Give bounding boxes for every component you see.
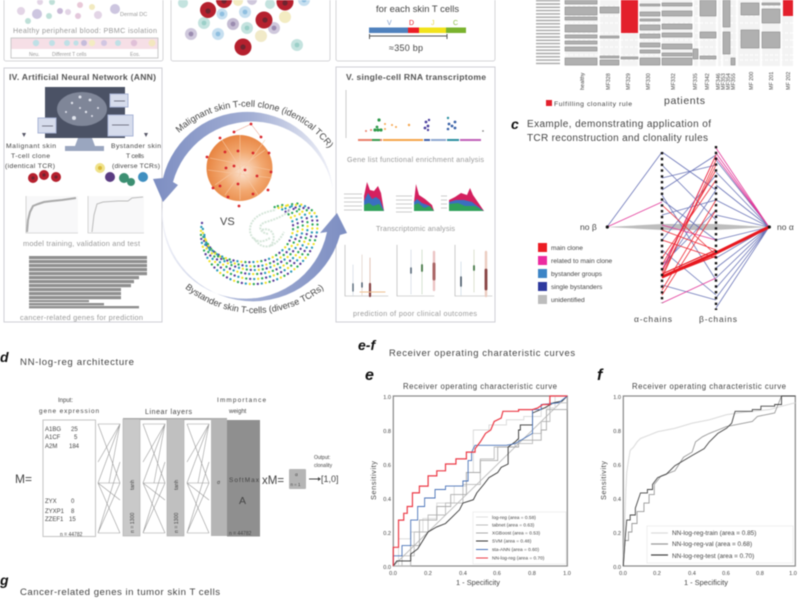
chart: ROC curve f: 0.0 — [613, 565, 621, 571]
chart: ROC curve e: 0.0 — [389, 571, 397, 577]
arrow: upper crescent — [153, 112, 333, 202]
panel: TCR sequence — [336, 0, 495, 61]
diagram: NN-log-reg architecture: σ — [217, 480, 221, 486]
legend: clone types — [538, 243, 613, 304]
caption: cancer-related genes: cancer-related genes for prediction — [20, 313, 143, 322]
diagram: NN-log-reg architecture: 0 — [71, 499, 75, 505]
chart: ROC curve f: Receiver operating characteristic curve — [632, 382, 786, 391]
axis: sample labels — [536, 0, 560, 65]
chart: ROC curve f: 1.0 — [613, 395, 621, 401]
icon: diverse bystander cells — [95, 163, 148, 186]
legend: ROC f: NN-log-reg-test (area = 0.70) — [672, 553, 754, 560]
axis: patient labels: healthy — [580, 72, 586, 90]
chart: ROC curve f: 0.4 — [688, 571, 696, 577]
diagram: NN-log-reg architecture: weight — [228, 409, 247, 415]
heading: panel c: TCR reconstruction and clonality rules — [527, 133, 708, 144]
legend: clone types: related to main clone — [551, 258, 613, 265]
heading: panel g: Cancer-related genes in tumor skin T cells — [20, 587, 220, 598]
chart: ROC curve e: 0.8 — [383, 429, 391, 435]
diagram: NN-log-reg architecture: A — [239, 495, 246, 507]
network: malignant clone — [206, 123, 272, 207]
legend: ROC e: SVM (area = 0.48) — [492, 538, 532, 544]
label: beta chains: β-chains — [699, 314, 737, 324]
label: f: f — [597, 367, 604, 384]
caption: enrichment: Gene list functional enrichment analysis — [347, 155, 484, 164]
axis: patient labels: MF330 — [646, 73, 652, 90]
diagram: VDJC segments: C — [453, 20, 458, 27]
heading: panel d: d — [0, 349, 9, 365]
diagram: NN-log-reg architecture: 184 — [69, 444, 80, 450]
diagram: NN-log-reg architecture: Immportance — [217, 397, 266, 404]
panel: healthy peripheral blood — [4, 0, 163, 61]
legend: clone types: unidentified — [551, 297, 585, 304]
axis: patient labels: MF 200 — [749, 72, 755, 90]
axis: patient labels: MF354 — [726, 73, 732, 90]
legend: clone types: bystander groups — [551, 271, 603, 278]
chart: ROC curve e: 0.0 — [383, 565, 391, 571]
axis: patient labels: MF353 — [721, 73, 727, 90]
legend: ROC e: tabnet (area = 0.63) — [492, 522, 535, 528]
diagram: NN-log-reg architecture: n = 44782 — [60, 532, 83, 538]
chart: ROC curve e: 0.4 — [383, 497, 391, 503]
chart: ROC curve f: 1 - Specificity — [684, 578, 728, 587]
legend: clone types: single bystanders — [551, 284, 603, 291]
label: no alpha: no α — [777, 222, 794, 232]
chart: gene importance bars — [29, 256, 147, 308]
chart: ROC curve e: 0.6 — [493, 571, 501, 577]
caption: clinical outcomes: prediction of poor clinical outcomes — [353, 309, 477, 318]
heading: panel g — [0, 572, 220, 598]
label: alpha chains: α-chains — [634, 314, 672, 324]
axis: patient labels: MF335 — [693, 73, 699, 90]
diagram: VDJC segments: J — [431, 20, 434, 27]
legend: ROC e — [473, 512, 566, 564]
label: bystander cells: T cells — [126, 153, 145, 160]
text: for each skin T cells: for each skin T cells — [376, 3, 459, 14]
chart: ROC curve e: 0.4 — [459, 571, 467, 577]
diagram: NN-log-reg architecture: tanh — [174, 480, 180, 490]
legend: clonality rule: Fulfilling clonality rule — [554, 101, 632, 108]
icon: red clone cells — [28, 170, 61, 183]
legend: ROC e: NN-log-reg (area = 0.70) — [492, 556, 545, 562]
diagram: NN-log-reg architecture: ZYX — [45, 499, 57, 505]
chart: ROC curve e: 0.8 — [528, 571, 536, 577]
diagram: NN-log-reg architecture: n = 1300 — [174, 513, 180, 533]
chart: ROC curve f: 0.6 — [722, 571, 730, 577]
diagram: NN-log-reg architecture: xM= — [262, 475, 284, 487]
diagram: NN-log-reg architecture: ZZEF1 — [45, 517, 64, 523]
label: malignant clone: Malignant skin — [6, 143, 56, 150]
label: no beta: no β — [580, 222, 597, 232]
chart: ROC curve f: 0.2 — [653, 571, 661, 577]
chart: ROC curve e: Receiver operating characteristic curve — [403, 382, 557, 391]
label: e: e — [365, 367, 374, 384]
axis: patient labels: MF342 — [705, 73, 711, 90]
diagram: NN-log-reg architecture: Output: — [314, 455, 330, 461]
chart: ROC curve e: 1.0 — [383, 395, 391, 401]
heading: panel IV: IV. Artificial Neural Network (ANN) — [9, 72, 156, 82]
label: malignant arc: Malignant skin T-cell clone (identical TCR) — [175, 100, 334, 149]
panel: IV artificial neural network — [4, 68, 162, 322]
chart: outcome strip plots — [345, 245, 492, 296]
legend: clone types: main clone — [551, 245, 583, 252]
label: malignant clone — [5, 143, 56, 170]
chart: ROC curve e: 1 - Specificity — [456, 578, 500, 587]
legend: ROC e: sta-ANN (area = 0.60) — [492, 547, 539, 553]
axis title: patients: patients — [664, 95, 705, 107]
chart: ROC curve e: Sensitivity — [369, 461, 378, 500]
heading: panel d — [0, 349, 134, 368]
chart: ROC curve e: 0.2 — [424, 571, 432, 577]
diagram: NN-log-reg architecture: n = 1 — [290, 482, 301, 487]
panel: healthy peripheral blood: Different T cells — [52, 52, 87, 58]
heading: PBMC isolation: Healthy peripheral blood: PBMC isolation — [13, 26, 157, 35]
axis: patient labels: MF355 — [731, 73, 737, 90]
caption: training: model training, validation and test — [23, 239, 140, 248]
label: bystander cells: Bystander skin — [111, 143, 161, 150]
axis: patient labels: MF 202 — [786, 72, 792, 90]
diagram: NN-log-reg architecture: ZYXP1 — [45, 509, 65, 515]
axis: patient labels — [580, 72, 792, 90]
label: malignant clone: T-cell clone — [11, 153, 50, 160]
chart: TCR alluvial network — [606, 146, 771, 310]
icon: monitor with neural brain — [38, 87, 133, 151]
caption: transcriptomic: Transcriptomic analysis — [376, 224, 455, 233]
heading: panel c — [511, 116, 711, 144]
panel: healthy peripheral blood: Dermal DC — [120, 12, 147, 18]
chart: ROC curve f: 0.0 — [619, 571, 627, 577]
axis: patient labels: MF 201 — [769, 72, 775, 90]
diagram: NN-log-reg architecture: 25 — [71, 427, 78, 433]
chart: training curves — [26, 196, 144, 233]
chart: ROC curve e: 0.6 — [383, 463, 391, 469]
legend: ROC e: XGBoost (area = 0.53) — [492, 530, 541, 536]
axis: patient labels: MF346 — [716, 73, 722, 90]
heading: panels e-f — [358, 337, 575, 358]
heading: panel c: c — [511, 116, 519, 132]
arrow: lower crescent — [162, 203, 347, 301]
diagram: VDJC segments — [369, 20, 466, 53]
chart: ROC curve f: 0.6 — [613, 463, 621, 469]
chart: ridge plots — [344, 182, 484, 212]
diagram: NN-log-reg architecture: A1BG — [45, 427, 61, 433]
panel b: clonality heatmap — [548, 0, 793, 66]
diagram: VDJC segments: V — [387, 20, 392, 27]
diagram: NN-log-reg architecture: 5 — [74, 435, 78, 441]
axis: patient labels: MF329 — [626, 73, 632, 90]
diagram: NN-log-reg architecture: 15 — [69, 517, 76, 523]
chart: ROC curve f: 0.2 — [613, 531, 621, 537]
chart: enrichment dots — [346, 90, 484, 141]
diagram: NN-log-reg architecture: A1CF — [45, 435, 61, 441]
axis: patient labels: MF328 — [606, 73, 612, 90]
chart: ROC curve f: 1.0 — [789, 571, 797, 577]
diagram: NN-log-reg architecture: α — [295, 473, 298, 478]
panel: V single-cell RNA transcriptome — [336, 67, 495, 322]
diagram: NN-log-reg architecture: A2M — [45, 444, 57, 450]
diagram: NN-log-reg architecture: Input: — [58, 398, 73, 404]
label: VS: VS — [220, 216, 235, 228]
chart: ROC curve e: 1.0 — [563, 571, 571, 577]
heading: panel d: NN-log-reg architecture — [20, 357, 134, 368]
network: bystander spiral — [201, 203, 317, 284]
diagram: NN-log-reg architecture: Linear layers — [145, 409, 192, 416]
chart: ROC curve f: 0.8 — [613, 429, 621, 435]
chart: ROC curve e: 0.2 — [383, 531, 391, 537]
chart: ROC curve f: 0.8 — [756, 571, 764, 577]
chart: ROC curve f: 0.4 — [613, 497, 621, 503]
diagram: NN-log-reg architecture: [1,0] — [321, 474, 339, 484]
label: bystander cells — [111, 143, 161, 170]
diagram: NN-log-reg architecture: n = 1300 — [130, 513, 136, 533]
diagram: VDJC segments: ≈350 bp — [389, 43, 423, 53]
label: bystander arc: Bystander skin T-cells (diverse TCRs) — [185, 283, 324, 314]
heading: panels e-f: Receiver operating charateristic curves — [389, 347, 575, 358]
chart: ROC curve f — [599, 382, 797, 587]
diagram: NN-log-reg architecture: tanh — [130, 480, 136, 490]
diagram: NN-log-reg architecture: 8 — [71, 509, 75, 515]
diagram: NN-log-reg architecture: n = 44782 — [229, 531, 252, 537]
diagram: NN-log-reg architecture: M= — [15, 472, 32, 486]
label: bystander cells: (diverse TCRs) — [112, 163, 160, 170]
heading: panels e-f: e-f — [358, 337, 376, 353]
diagram: NN-log-reg architecture: gene expression — [39, 408, 99, 415]
label: malignant clone: (identical TCR) — [5, 163, 55, 170]
panel: skin T cell mixture — [171, 0, 330, 61]
diagram: NN-log-reg architecture — [15, 397, 339, 538]
heading: panel c: Example, demonstrating application of — [527, 119, 711, 130]
panel: healthy peripheral blood: Eos. — [130, 52, 140, 58]
heading: panel g: g — [0, 572, 9, 588]
diagram: NN-log-reg architecture: SoftMax — [229, 477, 260, 484]
diagram: VDJC segments: D — [409, 20, 414, 27]
legend: ROC f: NN-log-reg-val (area = 0.68) — [672, 541, 752, 548]
panel: healthy peripheral blood: Neu. — [29, 52, 40, 58]
legend: ROC f: NN-log-reg-train (area = 0.85) — [672, 530, 756, 537]
chart: ROC curve f: Sensitivity — [599, 461, 608, 500]
diagram: NN-log-reg architecture: clonality — [314, 463, 333, 469]
legend: ROC e: log-reg (area = 0.58) — [492, 515, 536, 521]
chart: ROC curve e — [369, 382, 571, 587]
legend: ROC f — [647, 526, 793, 563]
axis: patient labels: MF332 — [671, 73, 677, 90]
heading: panel V: V. single-cell RNA transcriptome — [346, 72, 486, 82]
